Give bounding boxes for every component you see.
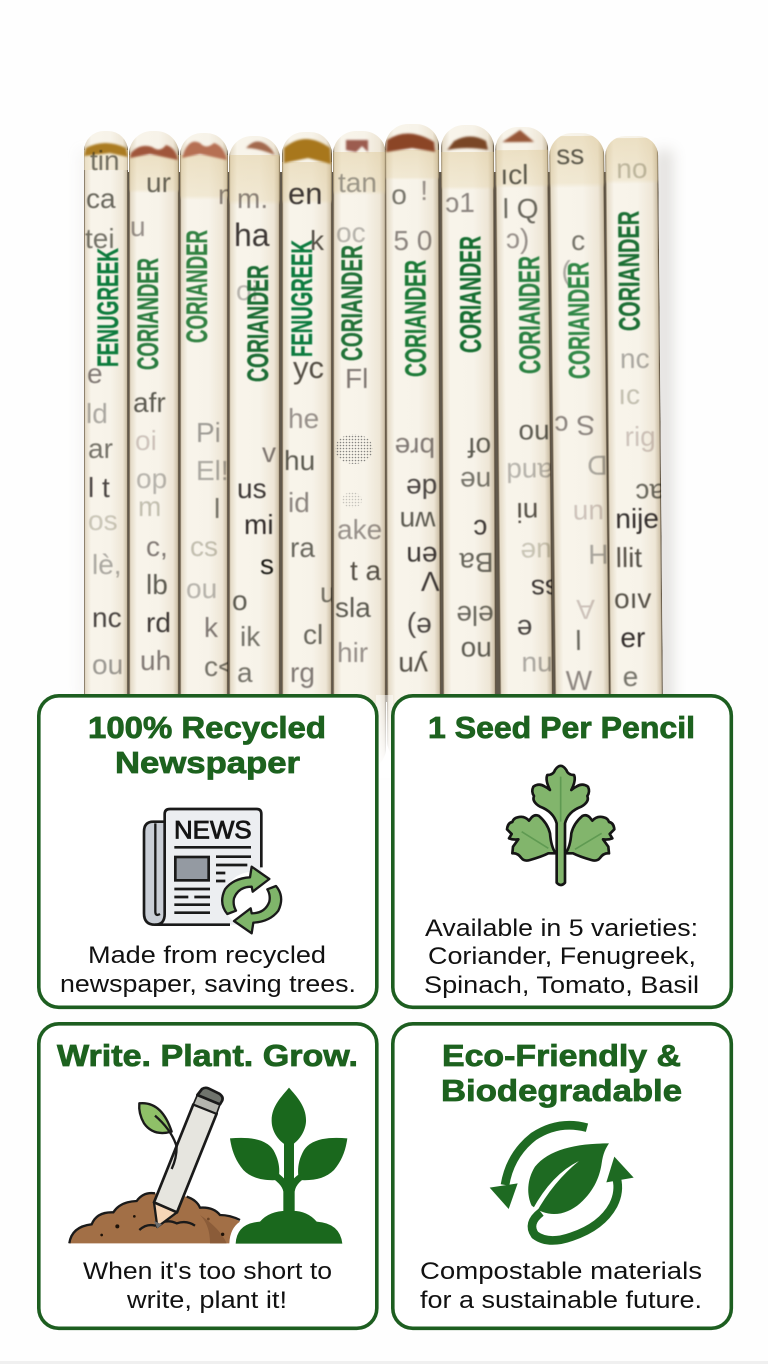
pencil 5: fenugreek: rg (290, 657, 315, 688)
pencil 6: coriander (333, 131, 386, 771)
pencil 5: fenugreek: id (288, 487, 310, 518)
pencil 2: coriander: oi (135, 425, 157, 456)
icon: coriander leaf (507, 766, 614, 885)
pencil 10: coriander: ( (561, 255, 572, 286)
pencil 10: coriander (549, 133, 610, 694)
pencil 4: coriander: ha (234, 217, 270, 253)
pencil 9: coriander: nu (521, 651, 553, 682)
caption: recycled newspaper: newspaper, saving trees. (60, 971, 356, 998)
heading: Eco-Friendly & Biodegradable: Eco-Friendly & (442, 1038, 681, 1073)
pencil 8: coriander: c (473, 514, 487, 545)
pencil 5: fenugreek: k (310, 225, 325, 256)
pencil 11: coriander: ıc (618, 379, 640, 410)
pencil 9: coriander: ıcl (500, 159, 529, 190)
caption: when too short plant it: write, plant it! (126, 1287, 287, 1314)
pencil 5: fenugreek (282, 132, 332, 694)
pencil 5: fenugreek: hu (284, 445, 315, 476)
pencil 1: fenugreek: os (88, 505, 118, 536)
pencil 8: coriander: ele (456, 600, 494, 631)
panel: write plant grow (39, 1024, 377, 1328)
pencil 1: fenugreek: e (87, 358, 103, 389)
pencil 9: coriander: and (506, 457, 553, 488)
pencil 10: coriander: un (573, 499, 604, 530)
pencil 6: coriander: t a (350, 555, 382, 586)
pencil 8: coriander: of (467, 432, 491, 463)
pencil 7: coriander: wn (400, 506, 436, 537)
pencil 8: coriander: Ba (459, 547, 494, 578)
pencil 10: coriander: CORIANDER (562, 262, 597, 379)
pencil 3: coriander: c< (204, 651, 234, 682)
pencil 6: coriander: ake (337, 514, 382, 545)
pencil 2: coriander: u (130, 211, 146, 242)
icon: leaf with circular arrows (490, 1125, 634, 1240)
heading: Eco-Friendly & Biodegradable: Biodegradable (441, 1073, 682, 1108)
pencil 2: coriander: CORIANDER (132, 258, 165, 370)
pencil 2: coriander: m (138, 491, 161, 522)
pencil 1: fenugreek: nc (92, 602, 122, 633)
pencil 1: fenugreek: lè, (92, 549, 122, 580)
pencil 8: coriander: CORIANDER (454, 236, 488, 353)
pencil 11: coriander: no (616, 153, 648, 184)
pencil 6: coriander: hir (337, 637, 368, 668)
pencil 2: coriander (129, 131, 179, 694)
pencil 9: coriander (495, 127, 553, 694)
pencil 10: coriander: W (566, 665, 593, 696)
pencil 1: fenugreek: ar (88, 433, 113, 464)
pencil 9: coriander: CORIANDER (513, 256, 547, 374)
pencil 1: fenugreek (84, 131, 128, 694)
pencil 7: coriander: de (406, 473, 437, 504)
pencil 11: coriander: CORIANDER (613, 211, 647, 331)
pencil 6: coriander: tan (338, 167, 377, 198)
heading: 100% Recycled Newspaper: Newspaper (115, 745, 300, 780)
panel: 100% recycled newspaper (39, 696, 377, 1007)
pencil 3: coriander: cs (190, 531, 218, 562)
pencil 2: coriander: ur (146, 167, 171, 198)
pencil 10: coriander: ss (556, 139, 584, 170)
pencil 5: fenugreek: ra (290, 532, 315, 563)
pencil 8: coriander: ɔ1 (445, 187, 475, 218)
pencil 3: coriander: ou (186, 573, 217, 604)
pencil 11: coriander: nije (615, 503, 659, 534)
pencil 7: coriander: o (391, 179, 407, 210)
panel: eco-friendly and biodegradable (393, 1024, 731, 1328)
pencil 2: coriander: uh (140, 645, 171, 676)
pencil 3: coriander: CORIANDER (181, 230, 214, 343)
pencil 7: coriander (385, 124, 441, 764)
pencil 3: coriander: El! (196, 455, 229, 486)
caption: compostable materials (420, 1258, 702, 1314)
pencil 9: coriander: no (518, 419, 550, 450)
pencil 10: coriander: A (576, 594, 595, 625)
pencil 11: coriander: nc (620, 343, 650, 374)
pencil 10: coriander: S c (554, 410, 595, 441)
icon: pencil planted in soil with sprout (69, 1088, 240, 1243)
pencil 9: coriander: e (517, 614, 533, 645)
pencil 5: fenugreek: yc (293, 350, 324, 385)
icon: newspaper with recycling arrows (144, 809, 281, 933)
pencil 4: coriander: CORIANDER (242, 265, 275, 382)
pencil 1: fenugreek: tei (85, 223, 115, 254)
pencil 11: coriander: oıv (614, 583, 652, 614)
pencil 5: fenugreek: FENUGREEK (286, 240, 319, 357)
pencil 11: coriander: rig (624, 421, 656, 452)
pencil 6: coriander: oc (336, 217, 366, 248)
pencil 4: coriander: v (262, 437, 276, 468)
pencil 1: fenugreek: tin (90, 145, 120, 176)
heading: 100% Recycled Newspaper (88, 710, 326, 780)
pencil 7: coriander: V (421, 566, 440, 597)
pencil 11: coriander (605, 136, 663, 694)
pencil 7: coriander: bre (395, 432, 435, 463)
pencil 2: coriander: rd (146, 607, 171, 638)
heading: 1 Seed Per Pencil: 1 Seed Per Pencil (428, 710, 695, 745)
pencil 9: coriander: ss (531, 574, 559, 605)
heading: 100% Recycled Newspaper: 100% Recycled (88, 710, 326, 745)
panel: 1 seed per pencil (393, 696, 731, 1007)
pencil 11: coriander: llit (616, 542, 642, 573)
caption: five varieties: Coriander, Fenugreek, (428, 943, 696, 970)
pencil 7: coriander: e) (407, 612, 432, 643)
caption: five varieties: Spinach, Tomato, Basil (424, 972, 699, 999)
pencil 1: fenugreek: FENUGREEK (92, 248, 125, 367)
pencil 7: coriander: CORIANDER (399, 260, 433, 377)
pencil 3: coriander: k (204, 612, 219, 643)
pencil 4: coriander (229, 136, 280, 694)
icon: newspaper with recycling arrows: NEWS (174, 816, 252, 844)
pencil 3: coriander: Pi (196, 417, 221, 448)
pencil 5: fenugreek: cl (303, 619, 323, 650)
pencil 2: coriander: afr (133, 387, 166, 418)
pencil 9: coriander: l Q (503, 193, 539, 224)
heading: Eco-Friendly & Biodegradable (441, 1038, 682, 1108)
pencil 1: fenugreek: ld (86, 398, 108, 429)
pencil 6: coriander: Fl (345, 363, 368, 394)
pencil 4: coriander: mi (244, 509, 274, 540)
pencil 4: coriander: a (237, 657, 253, 688)
pencil 5: fenugreek: he (288, 403, 319, 434)
pencil 4: coriander: o (232, 585, 248, 616)
pencil 4: coriander: us (237, 473, 267, 504)
pencil 4: coriander: ik (240, 621, 261, 652)
heading: Write. Plant. Grow.: Write. Plant. Grow. (57, 1038, 358, 1073)
pencil 11: coriander: e (623, 661, 638, 692)
pencil 3: coriander: n. (218, 179, 241, 210)
icon: green seedling silhouette (230, 1088, 347, 1244)
pencil 3: coriander: l (214, 493, 220, 524)
pencil 9: coriander: ue (520, 537, 552, 568)
pencil 10: coriander: H (588, 539, 609, 570)
pencil 8: coriander (441, 125, 496, 694)
pencil 1: fenugreek: l t (88, 472, 110, 503)
pencil 3: coriander (180, 133, 228, 694)
pencil 7: coriander: yn (398, 651, 428, 682)
pencil 2: coriander: op (136, 463, 167, 494)
pencil 9: coriander: ɔ) (506, 223, 529, 254)
pencil 5: fenugreek: u (320, 577, 336, 608)
pencil 6: coriander: sla (335, 592, 371, 623)
pencil 10: coriander: c (571, 225, 585, 256)
pencil 6: coriander: CORIANDER (336, 245, 369, 361)
caption: recycled newspaper (60, 942, 356, 998)
pencil 8: coriander: no (461, 636, 492, 667)
pencil 2: coriander: c, (146, 531, 168, 562)
photo: row of newspaper seed pencils (80, 124, 673, 778)
caption: compostable materials: for a sustainable future. (420, 1287, 702, 1314)
pencil 10: coriander: l (575, 625, 582, 656)
caption: when too short plant it: When it's too short to (83, 1258, 332, 1285)
pencil 7: coriander: en (406, 541, 438, 572)
pencil 4: coriander: oi (236, 275, 258, 306)
pencil 2: coriander: lb (146, 569, 168, 600)
pencil 4: coriander: m. (237, 183, 268, 214)
caption: when too short plant it (83, 1258, 332, 1314)
pencil 8: coriander: ne (460, 466, 491, 497)
caption: five varieties (424, 915, 699, 999)
pencil 1: fenugreek: ou (92, 649, 123, 680)
pencil 1: fenugreek: ca (86, 183, 116, 214)
caption: compostable materials: Compostable materials (420, 1258, 702, 1285)
pencil 7: coriander: ! (420, 175, 428, 206)
pencil 9: coriander: ni (516, 497, 538, 528)
caption: recycled newspaper: Made from recycled (88, 942, 326, 969)
pencil 7: coriander: 5 0 (393, 225, 432, 256)
pencil 4: coriander: s (260, 549, 274, 580)
pencil 10: coriander: D (587, 450, 608, 481)
pencil 11: coriander: ac (635, 478, 665, 509)
pencil 11: coriander: er (620, 622, 645, 653)
caption: five varieties: Available in 5 varieties: (425, 915, 698, 942)
pencil 5: fenugreek: en (288, 176, 322, 211)
